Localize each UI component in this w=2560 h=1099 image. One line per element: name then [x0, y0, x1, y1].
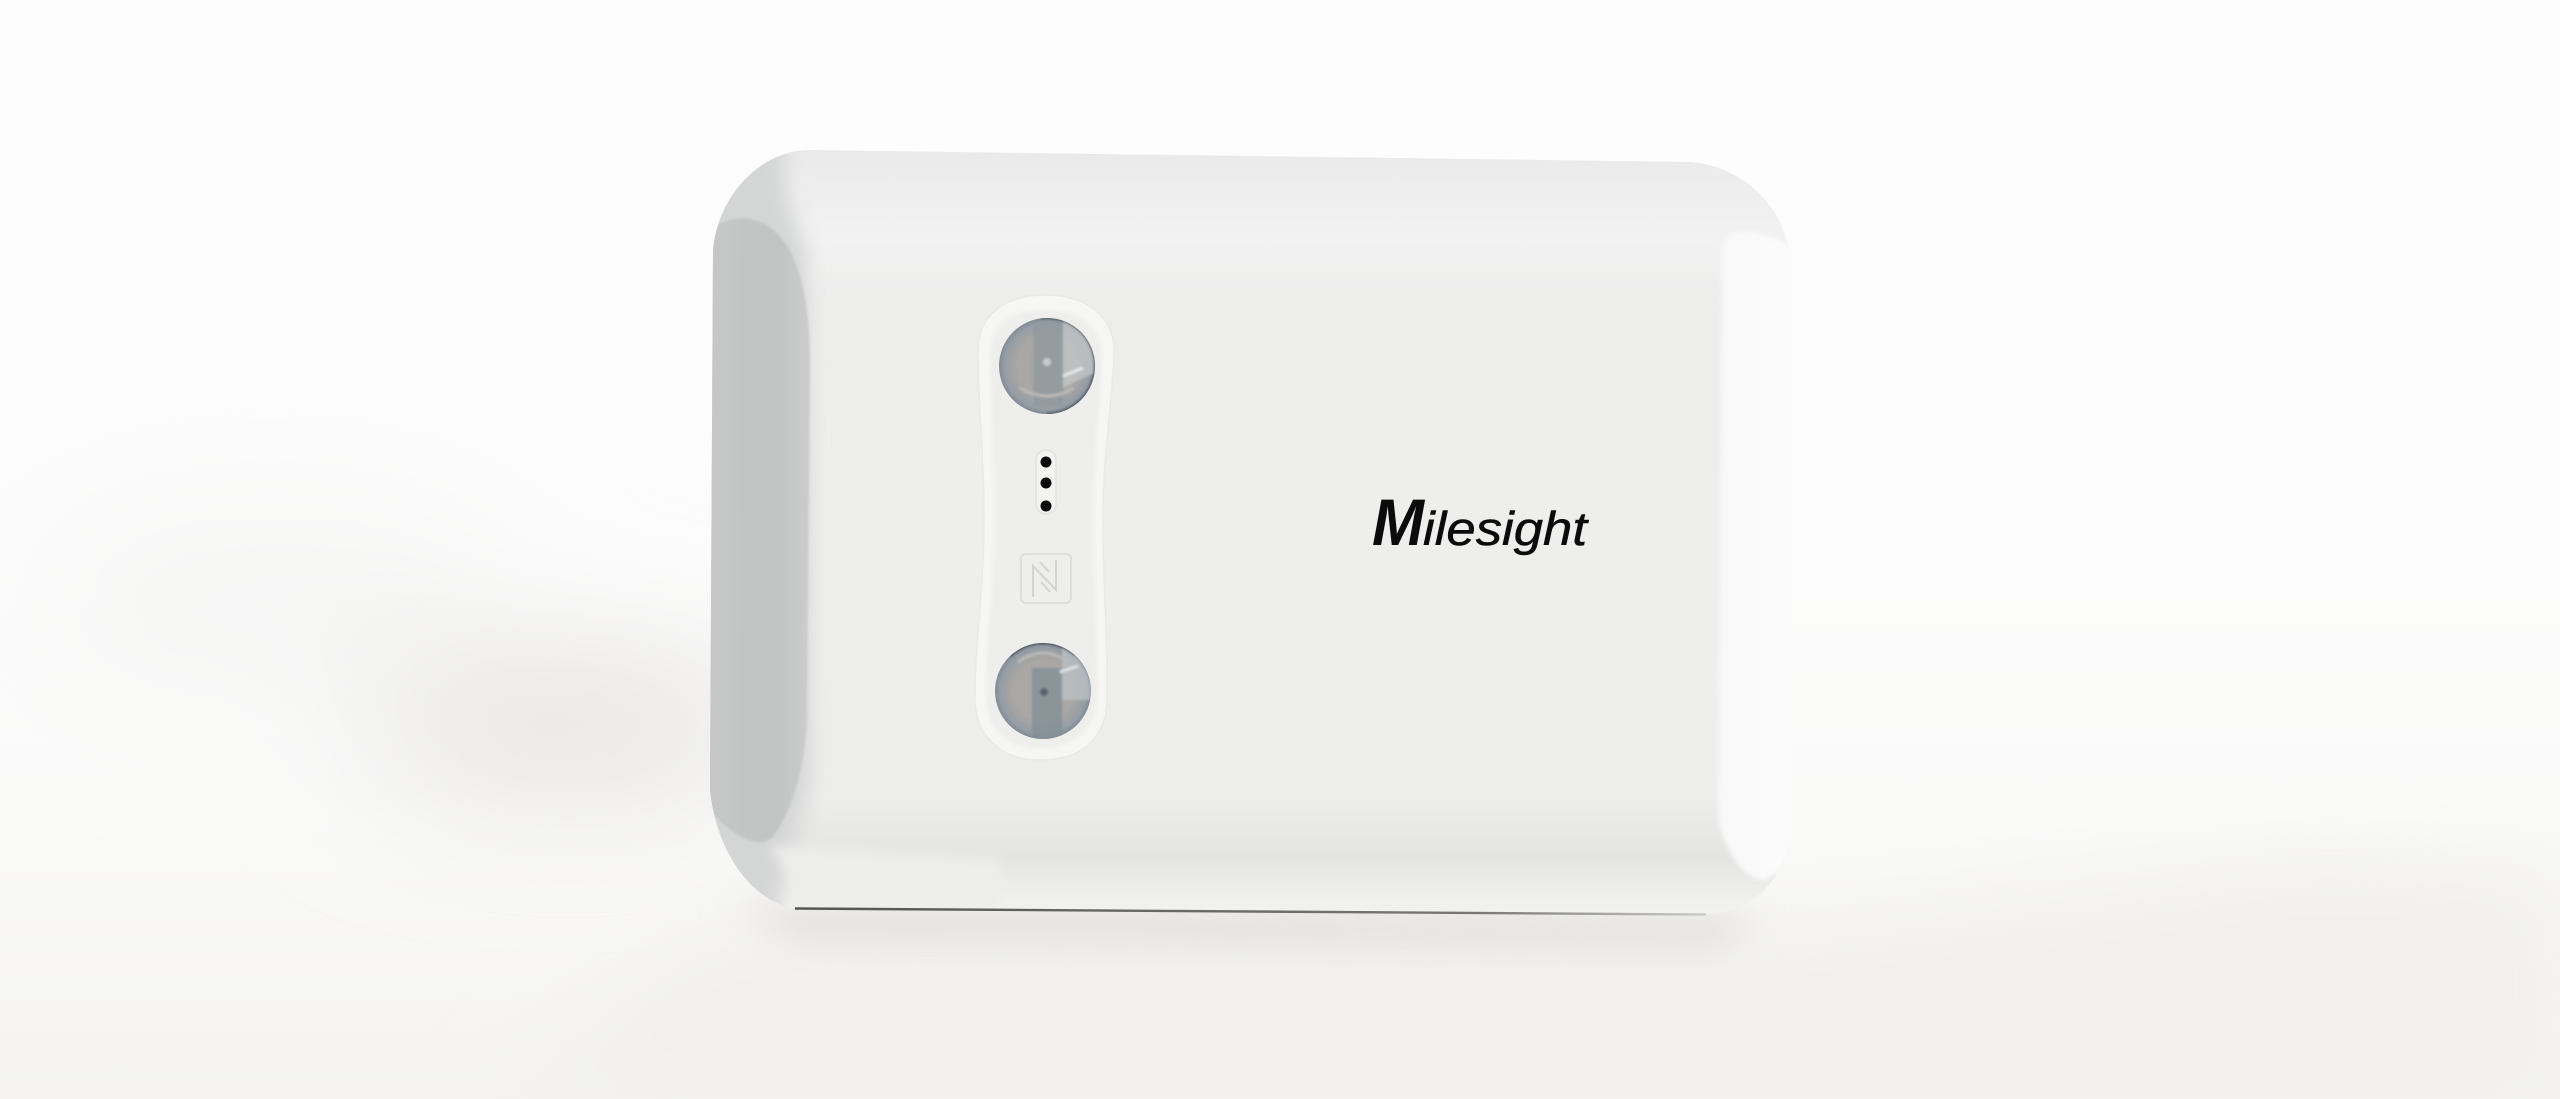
lens: bottom [995, 643, 1091, 739]
LED dots [1040, 456, 1052, 512]
right facet [1718, 236, 1790, 880]
bottom dark edge [795, 908, 1706, 914]
brand logo [1372, 485, 1589, 559]
indicator slot [1036, 450, 1056, 514]
brand logo: M [1372, 485, 1426, 559]
device face [782, 150, 1787, 913]
left side panel [700, 218, 810, 842]
brand logo: ilesight [1423, 502, 1589, 555]
module plate [975, 295, 1114, 760]
lens: top [999, 317, 1096, 414]
soft floor shadows [30, 510, 2560, 1099]
bottom-left lit corner [772, 845, 978, 875]
plate inner [986, 310, 1102, 748]
NFC mark [1021, 554, 1071, 603]
device [690, 130, 1800, 930]
sensor module [975, 295, 1114, 760]
left shaded edge [712, 154, 815, 906]
contact shadow [730, 905, 1760, 945]
